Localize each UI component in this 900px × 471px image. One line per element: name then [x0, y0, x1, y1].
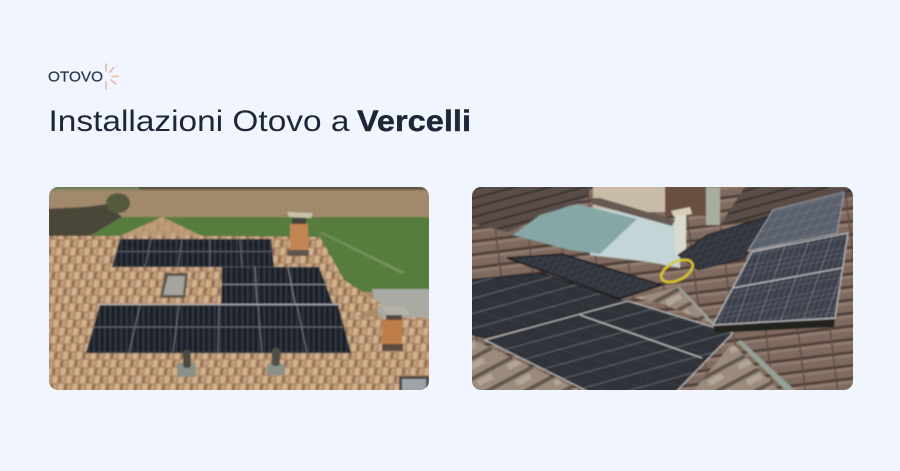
panel F [713, 233, 848, 333]
roof skylight [160, 273, 188, 298]
lower left weathered tiles [465, 335, 590, 395]
base roof tiles [465, 180, 860, 395]
chimney 2 [382, 307, 410, 351]
panel E [748, 192, 844, 251]
field track [318, 232, 405, 274]
logo: Otovo [48, 63, 119, 90]
panel A [507, 254, 662, 299]
upper dark tiles [720, 187, 860, 225]
gutter strip upper [677, 287, 714, 324]
lower centre weathered tiles [690, 343, 784, 395]
solar panels: bottom block [86, 304, 351, 353]
brown wooden wall [665, 180, 707, 216]
gutter strip [737, 340, 800, 395]
solar panels: top row [112, 239, 274, 267]
title bold text: Vercelli [357, 105, 471, 138]
title [48, 105, 471, 138]
tile ledge over conservatory [590, 198, 675, 226]
road [372, 289, 440, 319]
white conservatory wall [590, 207, 680, 268]
title regular text: Installazioni Otovo a [48, 105, 350, 138]
photo base [40, 180, 440, 395]
photo: roof with solar panels and fields [49, 187, 429, 390]
dark tiled roof top-left [465, 180, 593, 232]
icon: sun rays [106, 64, 118, 89]
green field [88, 217, 440, 292]
panel D [678, 216, 769, 270]
roof [40, 217, 440, 395]
logo wordmark: OTOVO [48, 68, 103, 86]
white pillar [671, 207, 692, 256]
hedge [40, 193, 130, 237]
yellow cable coil [658, 255, 696, 287]
centre weathered tiles [635, 287, 713, 324]
beige building wall [593, 180, 668, 212]
solar panels: middle block [221, 267, 333, 304]
lower skylight [399, 376, 429, 392]
far treeline [40, 180, 440, 190]
glass dome roof [513, 204, 637, 254]
chimney 1 [287, 212, 313, 256]
far green strip [49, 187, 139, 193]
vent 1 [177, 350, 196, 377]
wall post upper [706, 187, 720, 225]
vent 2 [267, 348, 285, 375]
panel C [485, 301, 733, 395]
panel B [465, 273, 625, 338]
brown field [40, 190, 440, 218]
photo: close-up of solar panels on brown tile roof [472, 187, 853, 390]
